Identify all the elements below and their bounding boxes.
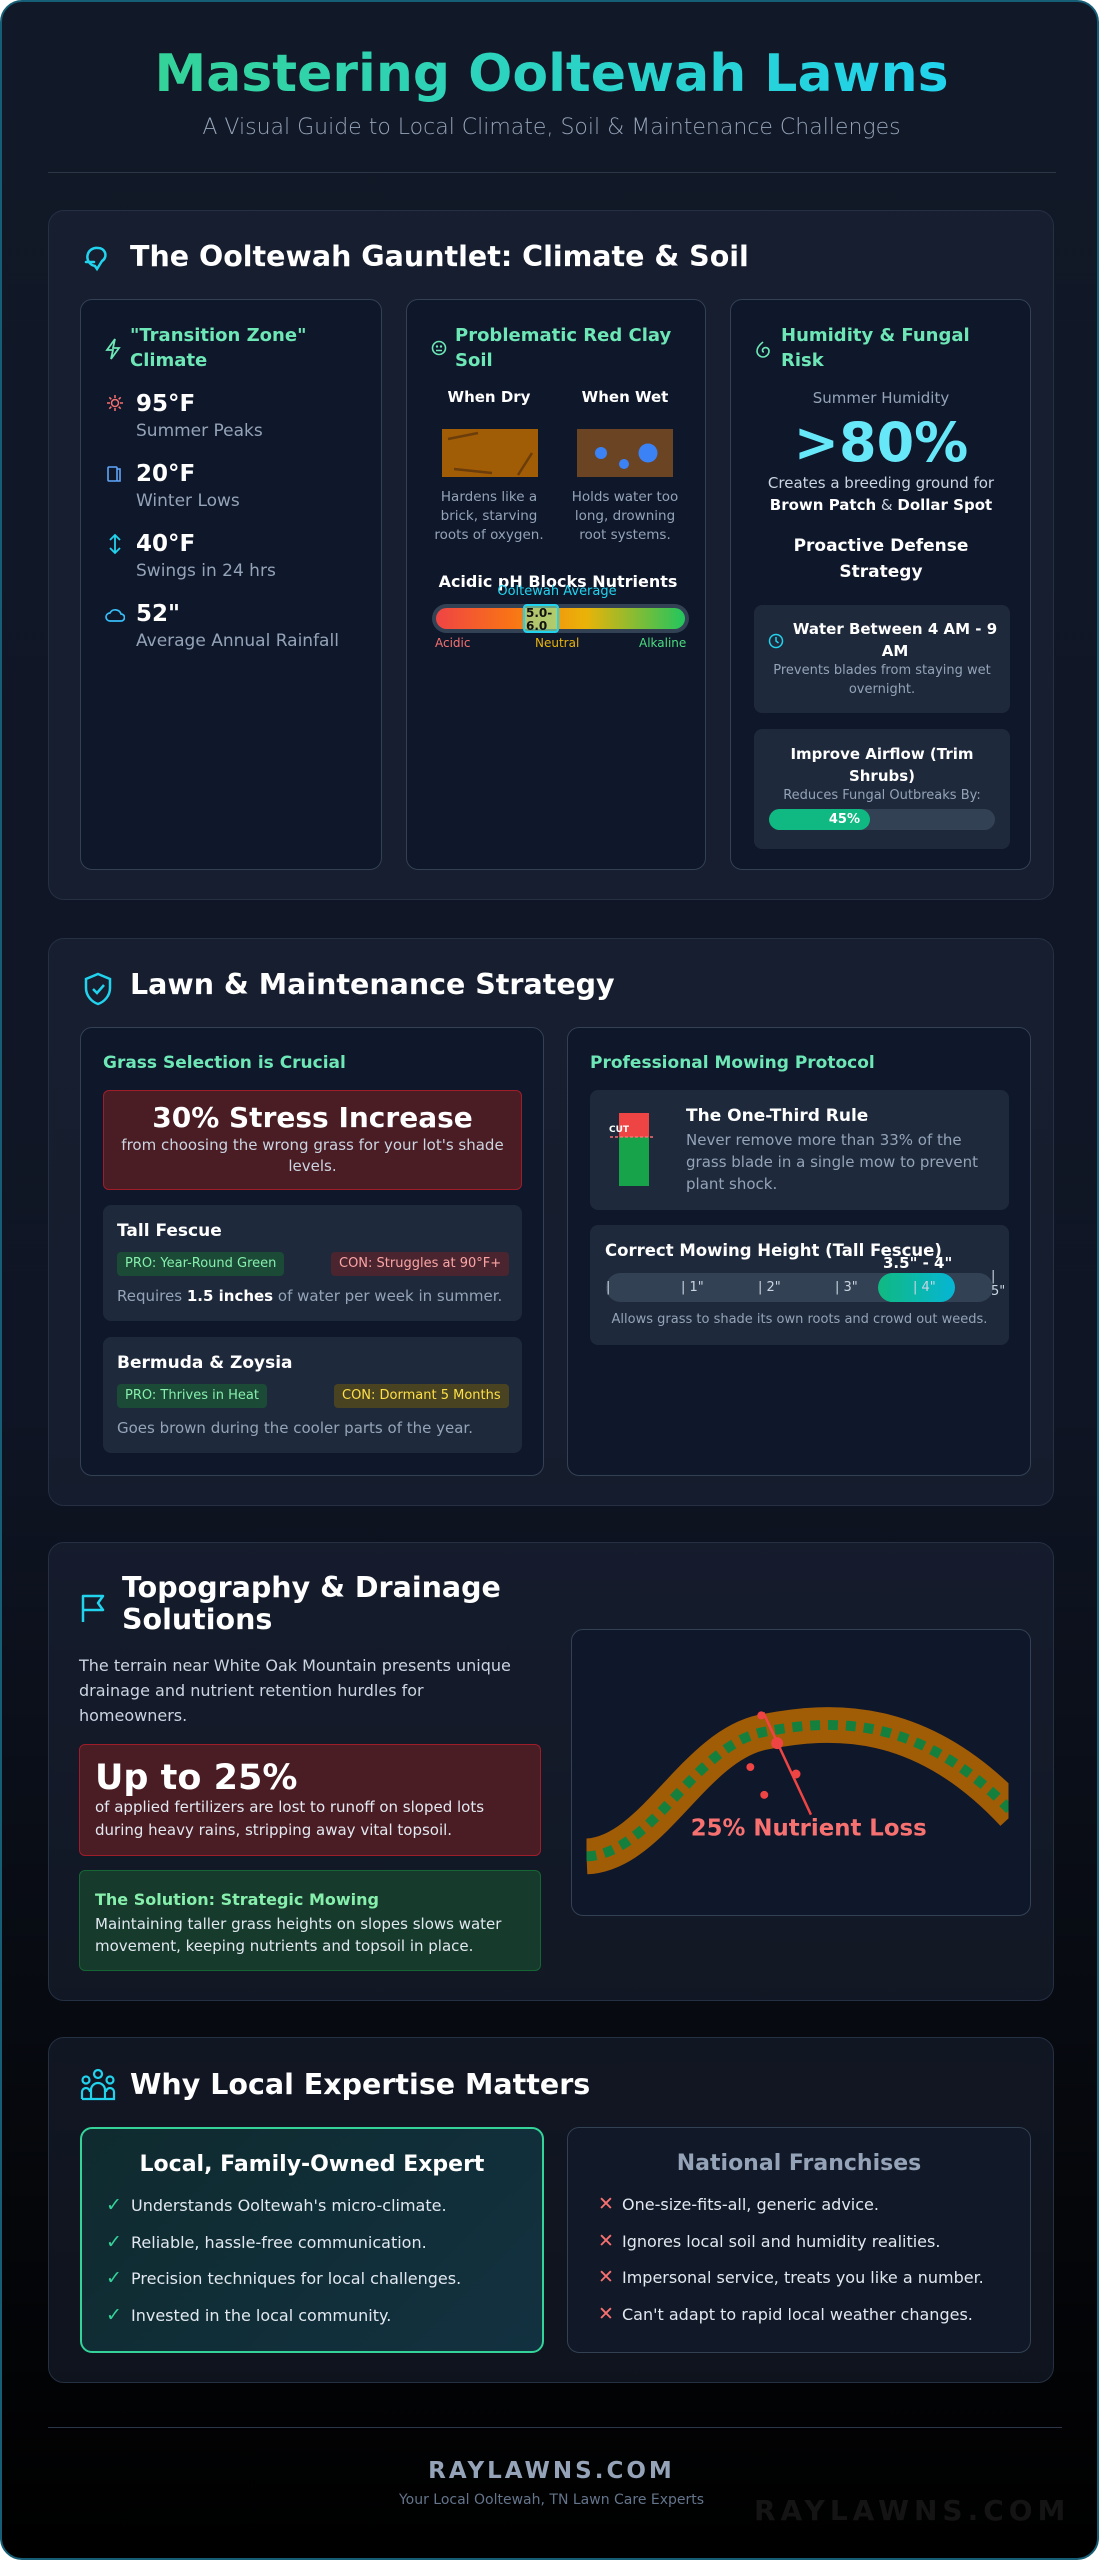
text block: drainage and nutrient retention hurdles for <box>79 1681 424 1700</box>
panel: mowing protocol: Professional Mowing Protocol <box>590 1053 875 1073</box>
wet column <box>572 388 678 543</box>
callout: 25% runoff: of applied fertilizers are lost to runoff on sloped lots <box>95 1798 484 1816</box>
pH scale chart: Ooltewah Average <box>497 584 617 599</box>
runoff particles <box>746 1711 811 1815</box>
panel: humidity & fungal risk: Summer Humidity <box>813 389 949 407</box>
pH scale chart: 5.0- <box>526 606 552 620</box>
callout: solution: The Solution: Strategic Mowing <box>95 1890 379 1909</box>
pH scale chart <box>432 572 689 650</box>
section: why local expertise <box>48 2037 1054 2383</box>
wet column: Holds water too <box>572 489 678 505</box>
heading: Why Local Expertise Matters <box>130 2068 590 2101</box>
one-third rule: Never remove more than 33% of the <box>686 1131 962 1149</box>
stat 52in: Average Annual Rainfall <box>136 631 339 651</box>
panel: national franchises: Can't adapt to rapid local weather changes. <box>622 2305 973 2324</box>
mowing height chart: 5" <box>991 1284 1005 1299</box>
callout: 30% stress: levels. <box>288 1157 337 1175</box>
panel: local expert: Reliable, hassle-free communication. <box>131 2233 427 2252</box>
stat 95F: Summer Peaks <box>136 421 263 441</box>
icon: bolt <box>105 338 121 360</box>
panel: national franchises: ✕ <box>598 2230 614 2252</box>
panel: humidity & fungal risk: Creates a breeding ground for <box>768 474 994 492</box>
tip: airflow: Reduces Fungal Outbreaks By: <box>783 788 981 803</box>
title: Climate <box>130 350 207 371</box>
wet column: root systems. <box>579 527 671 543</box>
panel: grass selection: Grass Selection is Crucial <box>103 1053 346 1073</box>
icon: soil <box>432 340 446 356</box>
panel: local expert: Invested in the local community. <box>131 2306 391 2325</box>
stat 52in <box>105 601 339 651</box>
pH scale chart: Acidic pH Blocks Nutrients <box>439 572 677 591</box>
heading: The Ooltewah Gauntlet: Climate & Soil <box>130 240 749 273</box>
panel: local expert: ✓ <box>106 2304 122 2326</box>
grass: bermuda: Goes brown during the cooler parts of the year. <box>117 1419 473 1437</box>
mowing height chart <box>590 1225 1009 1345</box>
big stat: >80% <box>794 411 968 474</box>
mowing height chart: | <box>606 1280 610 1295</box>
panel: grass selection <box>80 1027 544 1476</box>
mowing height chart: Allows grass to shade its own roots and crowd out weeds. <box>612 1312 987 1327</box>
callout: solution <box>79 1870 541 1971</box>
stat 20F: Winter Lows <box>136 491 240 511</box>
progress bar 45%: 45% <box>829 812 860 827</box>
title: Soil <box>455 350 493 371</box>
text block <box>78 1656 511 1725</box>
callout: 30% stress <box>103 1090 522 1190</box>
panel: mowing protocol <box>567 1027 1031 1476</box>
pH scale chart: Acidic <box>435 636 470 650</box>
watermark: RAYLAWNS.COM <box>754 2494 1070 2527</box>
panel: humidity & fungal risk: Strategy <box>839 562 923 582</box>
stat 20F: 20°F <box>136 461 195 487</box>
panel: transition zone climate <box>80 299 382 870</box>
wet column: long, drowning <box>575 508 675 524</box>
icon: people <box>80 2068 116 2100</box>
subtitle: A Visual Guide to Local Climate, Soil & Maintenance Challenges <box>202 115 901 140</box>
chart: hillside runoff diagram <box>571 1629 1031 1916</box>
title <box>781 325 970 371</box>
panel: humidity & fungal risk: Brown Patch & Dollar Spot <box>770 496 992 514</box>
dry column: roots of oxygen. <box>434 527 544 543</box>
section: lawn & maintenance strategy <box>48 938 1054 1506</box>
callout: solution: Maintaining taller grass heights on slopes slows water <box>95 1915 501 1933</box>
mowing height chart: | <box>991 1269 995 1284</box>
one-third rule: grass blade in a single mow to prevent <box>686 1153 978 1171</box>
pH scale chart: Alkaline <box>639 636 686 650</box>
panel: local expert: ✓ <box>106 2231 122 2253</box>
heading: Solutions <box>122 1603 272 1636</box>
icon: wet clay <box>577 429 673 477</box>
one-third rule: plant shock. <box>686 1175 777 1193</box>
footer tagline: Your Local Ooltewah, TN Lawn Care Experts <box>399 2492 704 2508</box>
tip: airflow: Shrubs) <box>849 767 915 785</box>
panel: national franchises: ✕ <box>598 2193 614 2215</box>
stat 95F <box>107 391 263 441</box>
panel: national franchises <box>567 2127 1031 2353</box>
mowing height chart: 3.5" - 4" <box>883 1254 952 1272</box>
footer brand: RAYLAWNS.COM <box>428 2458 675 2484</box>
stat 40F <box>109 531 276 581</box>
grass: bermuda: CON: Dormant 5 Months <box>342 1388 501 1403</box>
label: 25% Nutrient Loss <box>691 1816 927 1842</box>
icon: shield <box>84 972 112 1006</box>
panel: local expert: Understands Ooltewah's micro-climate. <box>131 2196 447 2215</box>
title <box>455 325 671 371</box>
tip: water timing: AM <box>882 642 908 660</box>
icon: grass blade cut <box>609 1113 653 1186</box>
dry column <box>434 388 544 543</box>
panel: humidity & fungal risk: Proactive Defense <box>794 536 968 556</box>
tip: water timing: overnight. <box>849 682 915 697</box>
tip: water timing <box>754 605 1010 713</box>
callout: 25% runoff <box>79 1744 541 1856</box>
title: Mastering Ooltewah Lawns <box>154 44 949 104</box>
heading: Topography & Drainage <box>122 1571 501 1604</box>
grass: tall fescue: CON: Struggles at 90°F+ <box>339 1256 501 1271</box>
dry column: When Dry <box>448 388 530 406</box>
title: Risk <box>781 350 824 371</box>
panel: national franchises: Ignores local soil and humidity realities. <box>622 2232 940 2251</box>
panel: national franchises: National Franchises <box>677 2151 921 2176</box>
icon: grass blade cut: CUT <box>609 1125 630 1135</box>
callout: 30% stress: from choosing the wrong grass for your lot's shade <box>121 1136 504 1154</box>
grass: tall fescue: Tall Fescue <box>117 1221 222 1241</box>
one-third rule <box>590 1090 1009 1210</box>
dry column: brick, starving <box>441 508 537 524</box>
tip: airflow <box>754 729 1010 849</box>
stat 52in: 52" <box>136 601 180 627</box>
panel: local expert: Local, Family-Owned Expert <box>140 2152 484 2177</box>
icon: swirl <box>756 342 770 358</box>
hill <box>587 1725 1014 1856</box>
tip: water timing: Water Between 4 AM - 9 <box>793 620 997 638</box>
stat 95F: 95°F <box>136 391 195 417</box>
wet column: When Wet <box>582 388 668 406</box>
heading: Lawn & Maintenance Strategy <box>130 968 615 1001</box>
section: topography & drainage <box>48 1542 1054 2001</box>
mowing height chart: | 3" <box>835 1280 858 1295</box>
panel: local expert: ✓ <box>106 2267 122 2289</box>
panel: red clay soil <box>406 299 706 870</box>
mowing height chart: | 4" <box>913 1280 936 1295</box>
panel: local expert: ✓ <box>106 2194 122 2216</box>
title <box>130 325 306 371</box>
mowing height chart: | 1" <box>681 1280 704 1295</box>
one-third rule: The One-Third Rule <box>686 1106 868 1126</box>
callout: 30% stress: 30% Stress Increase <box>152 1101 473 1134</box>
grass: tall fescue: Requires 1.5 inches of water per week in summer. <box>117 1287 502 1305</box>
pH scale chart: Neutral <box>535 636 579 650</box>
callout: 25% runoff: Up to 25% <box>95 1758 297 1798</box>
text block: The terrain near White Oak Mountain presents unique <box>79 1656 511 1675</box>
section: climate & soil <box>48 210 1054 900</box>
grass: bermuda: PRO: Thrives in Heat <box>125 1388 259 1403</box>
panel: national franchises: One-size-fits-all, generic advice. <box>622 2195 879 2214</box>
panel: national franchises: Impersonal service, treats you like a number. <box>622 2268 984 2287</box>
tip: airflow: Improve Airflow (Trim <box>790 745 974 763</box>
panel: local expert: Precision techniques for local challenges. <box>131 2269 461 2288</box>
grass: bermuda <box>103 1337 522 1453</box>
icon: thermometer-ish <box>84 246 107 272</box>
panel: national franchises: ✕ <box>598 2266 614 2288</box>
dry column: Hardens like a <box>441 489 537 505</box>
stat 20F <box>107 461 240 511</box>
icon: flag <box>82 1594 104 1622</box>
grass: tall fescue <box>103 1205 522 1321</box>
stat 40F: Swings in 24 hrs <box>136 561 276 581</box>
panel: national franchises: ✕ <box>598 2303 614 2325</box>
mowing height chart: | 2" <box>758 1280 781 1295</box>
grass: tall fescue: PRO: Year-Round Green <box>125 1256 276 1271</box>
stat 40F: 40°F <box>136 531 195 557</box>
heading <box>122 1571 501 1636</box>
callout: solution: movement, keeping nutrients and topsoil in place. <box>95 1937 473 1955</box>
progress bar 45% <box>769 809 995 830</box>
title: "Transition Zone" <box>130 325 306 346</box>
grass: bermuda: Bermuda & Zoysia <box>117 1353 292 1373</box>
tip: water timing: Prevents blades from staying wet <box>773 663 991 678</box>
text block: homeowners. <box>79 1706 187 1725</box>
title: Problematic Red Clay <box>455 325 671 346</box>
title: Humidity & Fungal <box>781 325 970 346</box>
panel: humidity & fungal risk <box>730 299 1031 870</box>
mowing height chart: Correct Mowing Height (Tall Fescue) <box>605 1241 942 1260</box>
pH scale chart: 6.0 <box>526 619 547 633</box>
icon: dry cracked clay <box>442 429 538 477</box>
callout: 25% runoff: during heavy rains, stripping away vital topsoil. <box>95 1821 452 1839</box>
panel: local expert <box>80 2127 544 2353</box>
